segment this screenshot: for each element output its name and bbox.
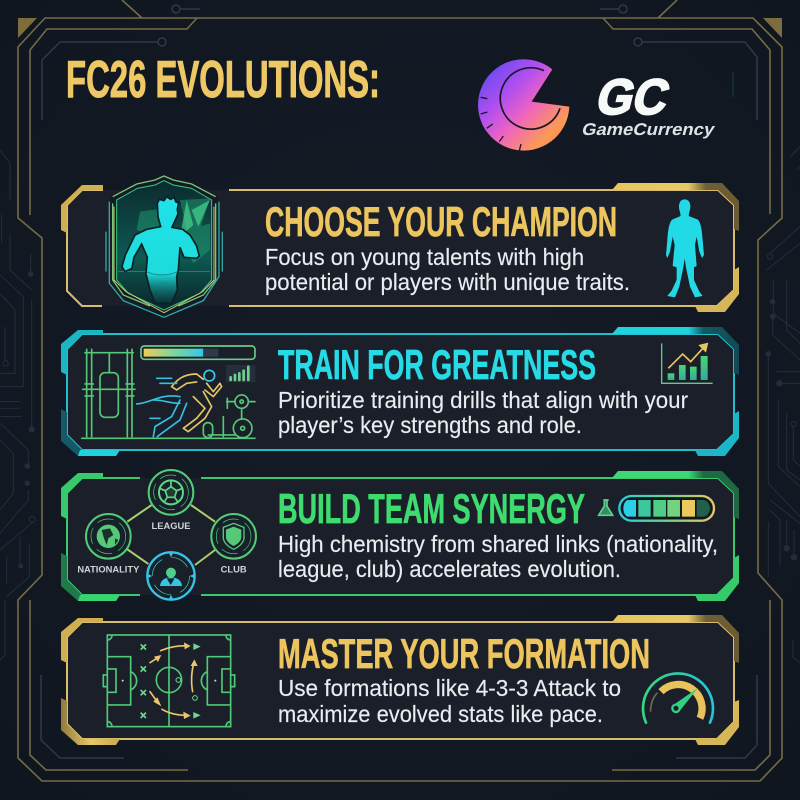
progress bar — [141, 346, 255, 359]
tactical arrows — [150, 646, 194, 715]
icon: training illustration — [82, 346, 255, 438]
gym equipment — [203, 395, 255, 438]
icon: speedometer gauge — [643, 673, 713, 723]
runner — [137, 370, 222, 437]
node: nationality: NATIONALITY — [77, 564, 140, 574]
logo wordmark GC: GC — [591, 69, 675, 125]
icon: player silhouette — [666, 199, 704, 297]
icon: growth chart — [662, 343, 713, 383]
icon: tactical pitch — [103, 635, 235, 727]
text: choose your champion — [265, 244, 630, 295]
logo: GameCurrency — [478, 59, 717, 151]
icon: flask — [599, 500, 613, 515]
panel: master your formation — [61, 615, 739, 745]
player markers — [141, 644, 146, 718]
logo wordmark GameCurrency: GameCurrency — [580, 119, 717, 139]
heading: train for greatness: TRAIN FOR GREATNESS — [278, 341, 596, 388]
chemistry network diagram — [77, 470, 256, 600]
node: club: CLUB — [221, 564, 247, 574]
icon: pull-up rig and punching bag — [82, 349, 255, 438]
text: train for greatness — [278, 387, 688, 438]
node: league — [149, 470, 193, 531]
text: train for greatness: player’s key strengths and role. — [278, 412, 582, 438]
circuit pattern: left side — [0, 213, 35, 597]
chemistry meter — [619, 496, 714, 521]
icon: coin logo — [478, 59, 569, 151]
text: master your formation: Use formations like 4-3-3 Attack to — [278, 675, 621, 701]
panel: train for greatness — [61, 327, 739, 456]
icon: flask and chemistry meter — [599, 496, 714, 521]
panel: choose your champion — [61, 175, 739, 317]
icon: player card shield — [106, 175, 222, 317]
player silhouette — [122, 197, 199, 303]
heading: build team synergy: BUILD TEAM SYNERGY — [278, 485, 585, 532]
node: club — [211, 514, 256, 574]
text: build team synergy: league, club) accelerates evolution. — [278, 556, 621, 582]
title: FC26 EVOLUTIONS: — [66, 51, 380, 109]
text: choose your champion: Focus on young talents with high — [265, 244, 584, 270]
circuit pattern: corners — [0, 72, 800, 663]
node: chemistry hub — [147, 552, 195, 600]
text: master your formation: maximize evolved stats like pace. — [278, 701, 603, 727]
text: master your formation — [278, 675, 621, 727]
panel: build team synergy — [61, 471, 739, 601]
node: league: LEAGUE — [152, 521, 190, 531]
text: choose your champion: potential or players with unique traits. — [265, 269, 630, 295]
text: train for greatness: Prioritize training drills that align with your — [278, 387, 688, 413]
text: build team synergy: High chemistry from shared links (nationality, — [278, 531, 718, 557]
node: nationality — [77, 514, 140, 574]
signal bars — [226, 365, 255, 382]
text: build team synergy — [278, 531, 718, 582]
circuit pattern: right side — [766, 227, 800, 577]
